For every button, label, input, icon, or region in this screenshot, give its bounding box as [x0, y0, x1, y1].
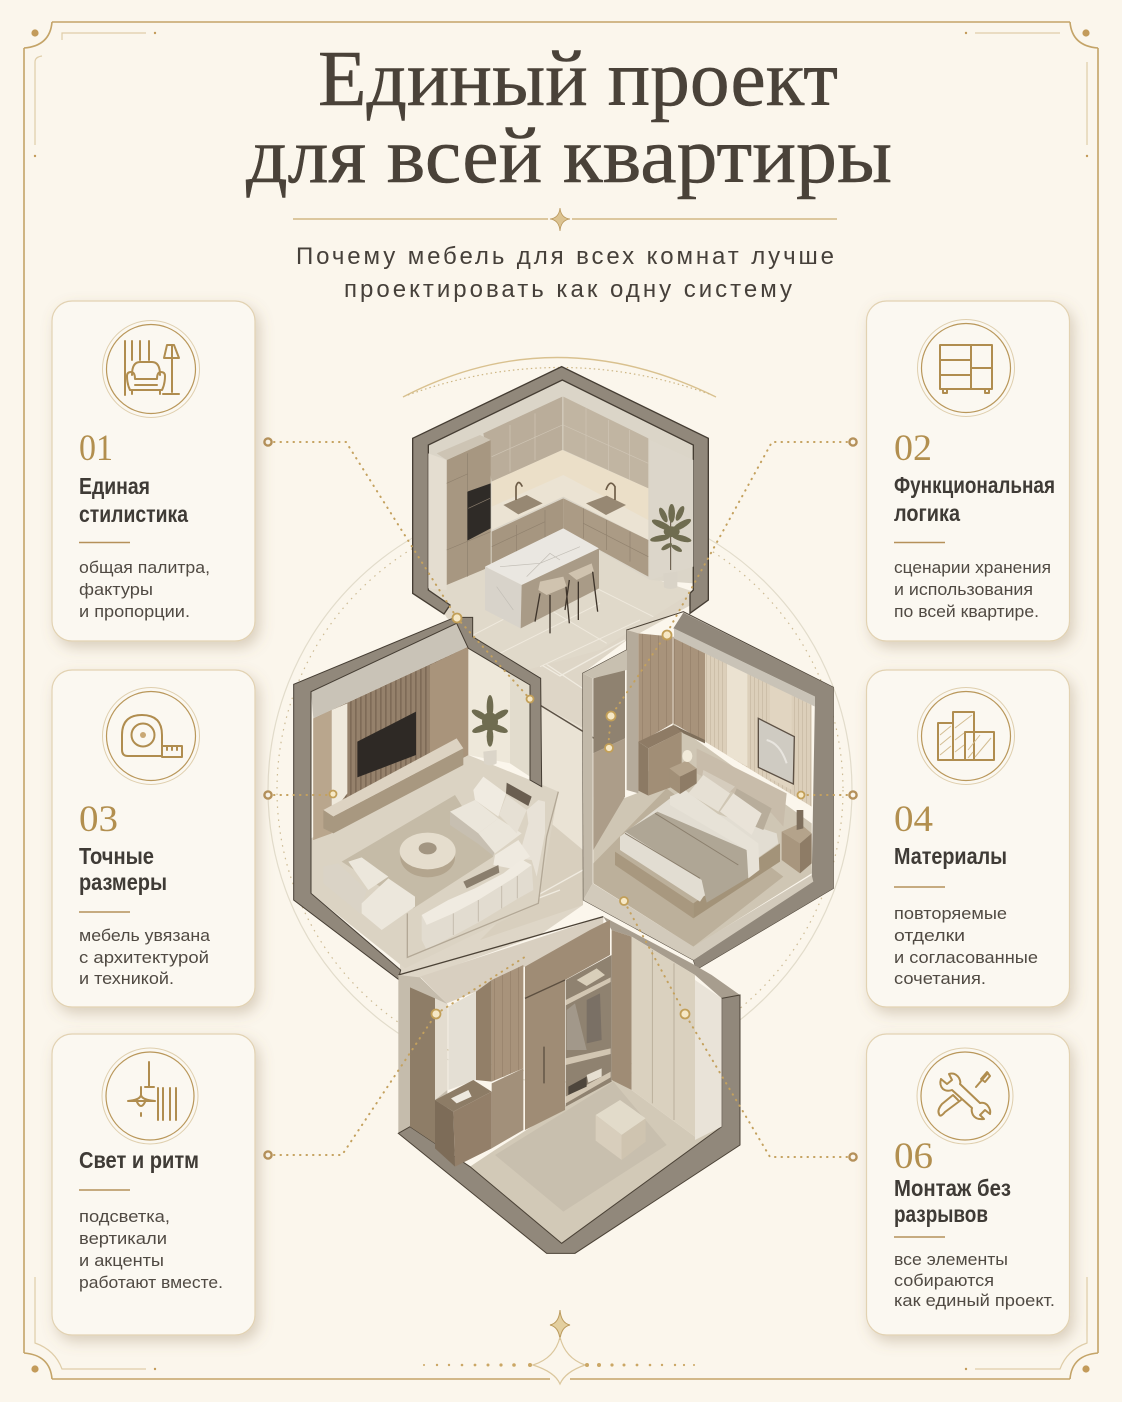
heading: размеры: [79, 869, 167, 895]
description: [79, 927, 211, 988]
number: 03: [79, 799, 118, 840]
number: 06: [894, 1136, 933, 1177]
open shelving with clothes: [566, 955, 612, 1107]
left wood and marble mirror: [410, 980, 492, 1143]
wardrobe walls: [398, 917, 740, 1253]
description: и использования: [894, 581, 1033, 599]
number: 01: [79, 428, 113, 469]
heading: Монтаж без: [894, 1175, 1011, 1201]
card 03: [52, 670, 255, 1007]
living walls: [294, 617, 542, 979]
description: собираются: [894, 1272, 994, 1290]
living floor: [311, 755, 558, 968]
description: как единый проект.: [894, 1292, 1055, 1310]
number: 04: [894, 799, 933, 840]
heading: Точные: [79, 843, 154, 869]
description: [79, 1208, 223, 1292]
card 01: [52, 301, 255, 641]
heading: [79, 843, 167, 895]
heading: стилистика: [79, 501, 188, 527]
bar stools: [535, 563, 598, 633]
heading: [79, 473, 188, 527]
icon: storage cabinet: [918, 320, 1014, 416]
description: [894, 905, 1038, 988]
description: и техникой.: [79, 970, 174, 988]
glowing nodes: [330, 614, 804, 1018]
backsplash with light: [492, 450, 648, 520]
tall cabinet with ovens: [428, 435, 491, 590]
description: общая палитра,: [79, 559, 210, 577]
wardrobe doors: [525, 920, 610, 1130]
description: сценарии хранения: [894, 559, 1051, 577]
description: мебель увязана: [79, 927, 211, 945]
description: подсветка,: [79, 1208, 170, 1226]
bottom ornament: [423, 1310, 695, 1384]
number: 02: [894, 428, 932, 469]
bedroom floor: [593, 723, 812, 947]
description: по всей квартире.: [894, 603, 1039, 621]
description: вертикали: [79, 1230, 167, 1248]
description: [79, 559, 210, 621]
description: сочетания.: [894, 970, 986, 988]
heading: Материалы: [894, 843, 1007, 869]
description: и акценты: [79, 1252, 164, 1270]
kitchen floor: [428, 530, 693, 670]
title: Единый проект: [318, 36, 838, 123]
bedroom back wall: [638, 633, 812, 807]
heading: логика: [894, 500, 960, 526]
corridor glass and translucent wall: [593, 668, 625, 850]
card 04: [866, 670, 1070, 1007]
icon: pendant light and vertical lines: [102, 1048, 198, 1144]
upper cabinets: [483, 397, 648, 488]
room: kitchen: [413, 367, 708, 670]
title divider with star: [293, 208, 837, 231]
description: повторяемые: [894, 905, 1007, 923]
description: [894, 1251, 1055, 1310]
heading: [894, 472, 1055, 526]
heading: Функциональная: [894, 472, 1055, 498]
heading: Единая: [79, 473, 150, 499]
background circles: [268, 358, 852, 1082]
icon: tape measure: [102, 688, 200, 784]
rug: [342, 795, 493, 908]
description: и пропорции.: [79, 603, 190, 621]
icon: material samples: [918, 688, 1014, 784]
title: [246, 36, 892, 200]
subtitle: Почему мебель для всех комнат лучше: [296, 243, 834, 270]
artwork: [758, 718, 794, 784]
plant: [650, 504, 693, 589]
bed: [615, 748, 787, 918]
right wardrobe: [612, 930, 722, 1140]
right tall cabinet: [650, 440, 693, 580]
kitchen walls: [413, 367, 708, 614]
rug: [593, 788, 783, 947]
card 05: [52, 1034, 255, 1335]
description: и согласованные: [894, 949, 1038, 967]
subtitle: проектировать как одну систему: [344, 276, 792, 303]
card 02: [866, 301, 1070, 641]
icon: wrench and screwdriver: [917, 1048, 1013, 1144]
coffee table: [400, 833, 456, 877]
subtitle: [296, 243, 834, 303]
room: walk-in wardrobe: [398, 917, 740, 1253]
slatted panel: [492, 965, 523, 1148]
description: отделки: [894, 927, 965, 945]
description: [894, 559, 1051, 621]
base cabinets: [492, 498, 648, 577]
worktop: [492, 475, 648, 540]
media console: [323, 738, 463, 833]
cabinet: [638, 725, 705, 796]
central corridor floor: [400, 540, 700, 985]
heading: Свет и ритм: [79, 1147, 199, 1173]
island: [485, 528, 599, 628]
description: все элементы: [894, 1251, 1008, 1269]
room: bedroom: [583, 612, 833, 969]
sofa: [422, 777, 545, 950]
room: living room: [294, 617, 558, 979]
connector end points: [264, 438, 857, 1161]
front low wall: [407, 792, 558, 957]
corridor marble and wardrobe floor: [420, 917, 722, 1243]
sinks and faucets: [503, 482, 626, 515]
icon: armchair and lamp: [102, 320, 200, 418]
nightstands and lamps: [669, 750, 812, 873]
pouf: [596, 1100, 646, 1160]
chaise: [323, 857, 415, 930]
bedroom walls: [583, 612, 833, 969]
description: фактуры: [79, 581, 153, 599]
plant: [470, 695, 510, 765]
living back wall: [313, 647, 530, 840]
connector network: [264, 438, 857, 1161]
TV: [357, 712, 416, 777]
heading: [894, 1175, 1011, 1227]
title: для всей квартиры: [246, 113, 892, 200]
heading: разрывов: [894, 1201, 988, 1227]
card 06: [866, 1034, 1070, 1335]
vanity: [435, 1080, 492, 1167]
description: с архитектурой: [79, 949, 209, 967]
description: работают вместе.: [79, 1274, 223, 1292]
